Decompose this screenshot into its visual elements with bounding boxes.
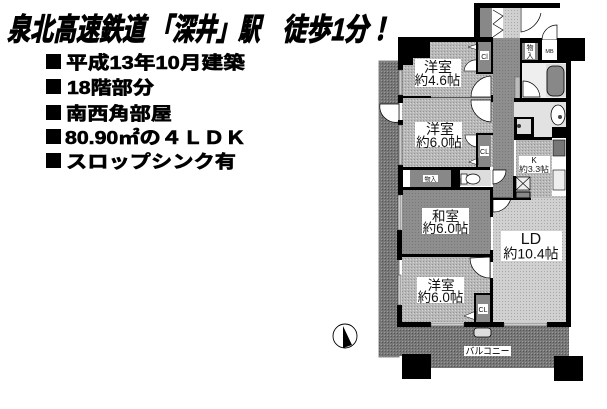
feature list: 南西角部屋 <box>66 104 172 124</box>
kitchen <box>516 138 566 198</box>
room: western room 6.0 upper: 約6.0帖 <box>416 135 462 150</box>
balcony <box>379 61 569 368</box>
room: living dining <box>493 198 566 322</box>
closet: upper CL: Cl <box>481 54 488 61</box>
closet: middle CL: CL <box>480 149 489 156</box>
feature list: 平成13年10月建築 <box>66 52 245 73</box>
kitchen: K <box>531 156 537 165</box>
room: western room 6.0 upper: 洋室 <box>426 121 454 137</box>
bathroom <box>515 63 566 99</box>
room: japanese room: 和室 <box>432 209 459 224</box>
room: living dining: LD <box>521 231 541 248</box>
title: 徒歩1分！ <box>281 13 398 47</box>
window strips <box>398 70 547 326</box>
room: western room 6.0 lower <box>402 257 491 322</box>
title: 泉北高速鉄道 <box>6 13 151 47</box>
feature list <box>46 52 246 172</box>
room: western room 4.6 <box>402 42 493 97</box>
washroom <box>514 102 566 138</box>
title <box>6 13 398 47</box>
columns <box>402 354 583 381</box>
storage closet: 物入 <box>424 176 437 184</box>
closet: lower CL <box>464 257 490 322</box>
balcony: バルコニー <box>466 346 510 358</box>
room: western room 6.0 upper <box>402 98 493 167</box>
hallway door to living <box>493 170 511 212</box>
storage and meter box <box>521 40 557 60</box>
room: living dining: 約10.4帖 <box>503 246 559 262</box>
storage and meter box: MB <box>545 49 554 55</box>
room: japanese room: 約6.0帖 <box>423 221 468 236</box>
closet: middle CL <box>465 135 491 167</box>
title: 「深井」駅 <box>149 13 266 47</box>
kitchen: 約3.3帖 <box>519 164 549 174</box>
storage and meter box: 物 <box>526 43 534 52</box>
feature list: 18階部分 <box>67 78 154 98</box>
doors of upper rooms <box>471 76 491 122</box>
walls <box>397 3 585 327</box>
storage and meter box: 入 <box>526 52 534 60</box>
closet: lower CL: CL <box>479 307 488 314</box>
storage closet <box>410 170 451 187</box>
corridor <box>493 38 520 100</box>
floor plan <box>379 3 585 381</box>
icon: compass <box>333 324 357 348</box>
room: western room 4.6: 約4.6帖 <box>415 73 460 88</box>
room: western room 6.0 lower: 洋室 <box>428 278 454 293</box>
room: western room 4.6: 洋室 <box>424 59 452 75</box>
entrance <box>480 8 557 40</box>
feature list: 80.90㎡の４ＬＤＫ <box>65 128 246 148</box>
closet: upper CL <box>464 42 491 72</box>
room: japanese room <box>402 187 491 254</box>
feature list: スロップシンク有 <box>66 152 236 172</box>
room: western room 6.0 lower: 約6.0帖 <box>418 290 463 305</box>
toilet <box>454 170 491 186</box>
